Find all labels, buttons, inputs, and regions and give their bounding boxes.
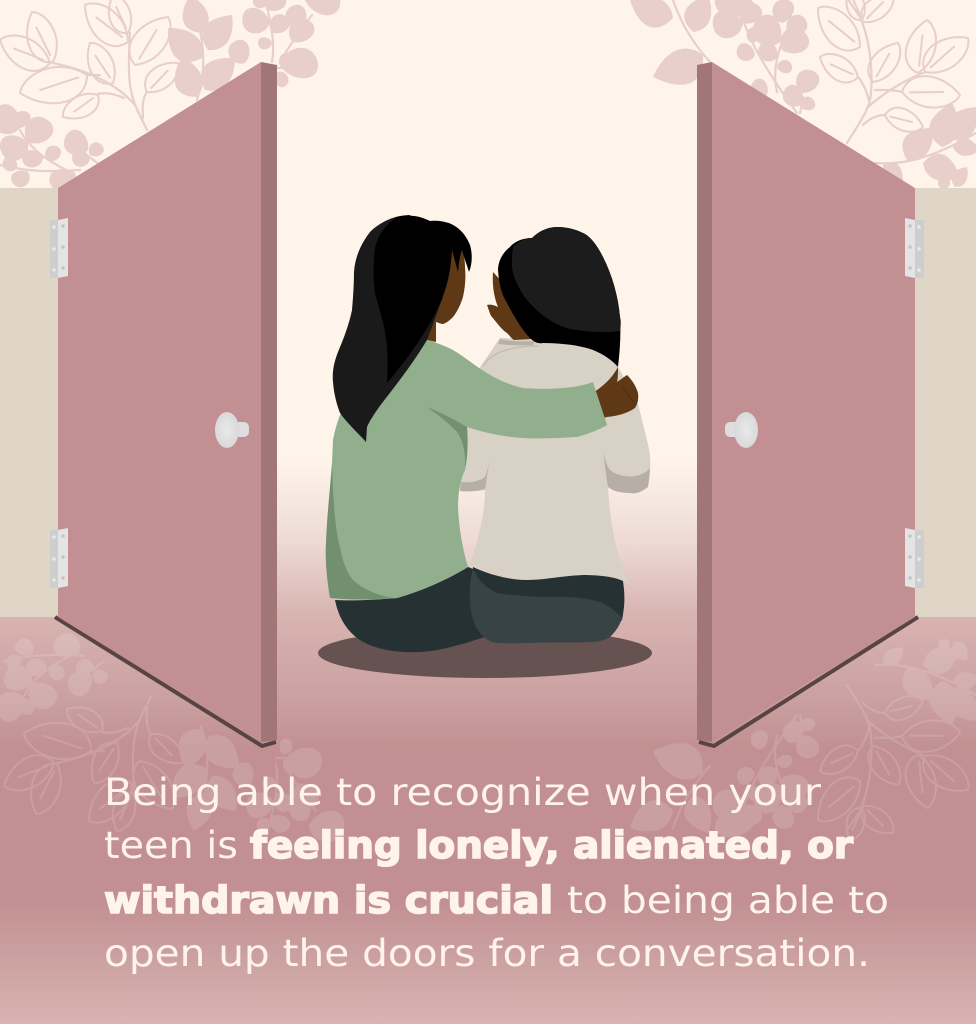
caption text: teen is [104,824,238,867]
door: right [697,62,924,746]
floor shadow [318,628,652,678]
mother: pants [335,567,485,652]
door knob: right [725,412,758,448]
caption text: feeling lonely, alienated, or [250,824,854,867]
caption text: to being able to [567,879,889,922]
caption text: Being able to recognize when your [104,771,822,814]
caption text [104,771,889,975]
hinge: right top [905,218,924,278]
mother: sweater [326,340,607,600]
mother: hand on shoulder [590,367,638,420]
left wall [0,188,58,617]
decorative leaves: top right [623,0,976,190]
mother: hair [333,215,472,442]
teen: shirt [460,338,650,584]
floor leaves [0,629,976,845]
teen: hand at face [487,272,532,340]
hinge: right bottom [905,528,924,588]
decorative leaves: top left [0,0,343,197]
door: left [50,62,277,746]
door knob: left [215,412,249,448]
illustration: mother and teen seated [318,215,652,678]
hinge: left bottom [50,528,68,588]
caption text: withdrawn is crucial [104,879,553,922]
right wall [915,188,976,617]
mother: neck and face [425,248,465,342]
teen: pants [470,567,624,643]
teen: hair [498,227,621,367]
caption text: open up the doors for a conversation. [104,932,870,975]
hinge: left top [50,218,68,278]
